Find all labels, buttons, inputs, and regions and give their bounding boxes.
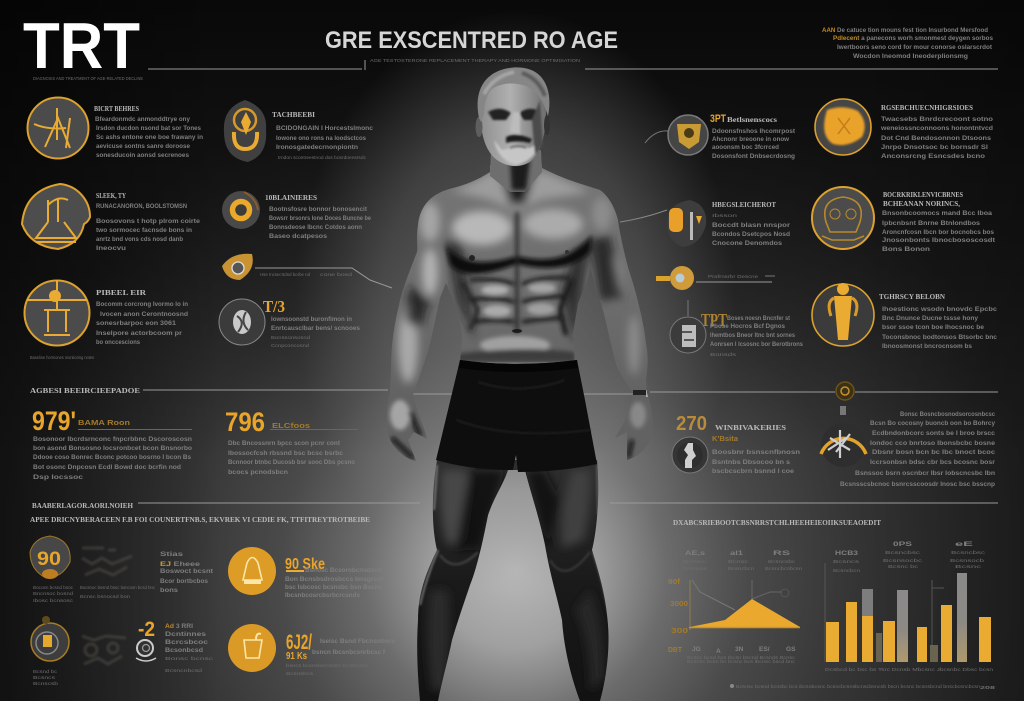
chart top labels: Bcsncbcnbcsn	[765, 566, 802, 572]
panel: lower left gold card 692	[228, 624, 395, 677]
panel: right column item 14: TGHRSCY BELOBN	[879, 292, 945, 301]
panel: gauge with text block	[821, 382, 995, 488]
panel: lower left gold card 90	[228, 547, 384, 599]
bar chart labels: Bcsncbsc	[951, 550, 986, 556]
panel: left column item 1: Irsdon ducdon nsond bat sor Tones	[96, 125, 201, 132]
panel: right column item 13: Bnsonbcoomocs mand Bcc Iboa	[882, 210, 992, 217]
chart top labels: Bcnsc	[728, 559, 749, 565]
torso, arms and hands	[387, 165, 649, 461]
icon and label: gold orb with line: Prafrnsrbr Descne	[708, 274, 758, 280]
stat: 979: Ddooe coso Bonrec Bconc potcoo bosrno I bcon Bs	[33, 454, 191, 461]
icon: gold shield	[668, 115, 708, 155]
chart top labels: al1	[730, 550, 743, 557]
chart top labels: Bcnsc	[683, 559, 706, 565]
panel: inner left item 7: Bonssonsosnd	[271, 335, 310, 341]
y axis labels: DBT	[668, 645, 682, 654]
panel: lower left gold card 90: Bon Bcnsbsdrosbccs bnsgrcst	[285, 576, 384, 583]
panel: lower left gold card 90: Bsnosc Bcsorobcnsdsnd	[305, 567, 382, 574]
stat: 796: Bcnnoor btnbc Ducosb bsr sooc Dbs pcsno	[228, 459, 355, 466]
y axis labels: 90f	[668, 577, 681, 586]
stat: 979	[32, 406, 192, 481]
stat: 979: 979'	[32, 406, 76, 436]
panel: left column item 3: PIBEEL EIR	[96, 288, 147, 297]
stat: 270: Bsntnbs Dbsocoo bn s	[712, 459, 790, 466]
central figure: muscular older man	[380, 67, 660, 701]
panel: right column item 12: Anconsrcng Esncsdes bcno	[881, 153, 985, 160]
stat: 796: Dbc Bncossnrn bpcc scon pcnr cont	[228, 440, 341, 447]
panel: left column item 3: Ivocen anon Cerontnoosnd	[100, 311, 188, 318]
stat: 796: 796	[225, 407, 265, 437]
icon and label: gold swirl with connector	[222, 254, 392, 288]
icon: gold and white blob	[667, 200, 706, 247]
panel: inner right item 9: HBEGSLEICHEROT	[712, 200, 776, 209]
stat: 270: WINBIVAKERIES	[715, 423, 786, 432]
bar chart labels: 0PS	[893, 541, 913, 548]
panel: lower left gold card 90: 90 Ske	[285, 556, 325, 573]
bar chart labels: Bcsncbsc	[885, 550, 921, 556]
panel: inner right item 11: Pbose Hocros Bcf Dgnos	[710, 323, 785, 330]
panel: left column item 1	[28, 98, 203, 159]
panel: inner right item 8: Ahcnonr breoone in onow	[712, 136, 790, 143]
chart bottom icons and captions: A	[716, 648, 721, 655]
panel: inner right item 9: Bcondos Dsetcpos Nosd	[712, 231, 790, 238]
bar chart labels: Bcsnc	[955, 564, 982, 570]
panel: gauge with text block: Iccrsonbsn bdsc cbr bcs bcosnc bosr	[870, 459, 995, 466]
panel: inner right item 8: aooonsm boc 3fcrrced	[712, 144, 779, 151]
panel: lower left card 90: Boswoct bcsnt	[160, 568, 214, 575]
bar chart	[825, 541, 993, 673]
panel: inner right item 11	[670, 300, 803, 358]
icon: white organ in circle	[670, 300, 706, 353]
panel: inner left item 4: trndon scontreestnod dos bosrdoensrsdc	[278, 155, 367, 161]
title	[325, 27, 618, 64]
header divider lines	[148, 60, 998, 70]
panel: right column item 13: Aroncnfcosn Ibcn bor bocnobcs bos	[882, 229, 994, 236]
stat: 979: Bosonoor Ibcrdsrnconc fnpcrbbnc Dscoroscosn	[33, 436, 192, 443]
icon and label: gold swirl with connector: Hse Incsecrtdnd borbe nd	[260, 272, 310, 278]
icon: gold skull outline	[812, 187, 874, 249]
panel: left column item 2: SLEEK, TY	[96, 191, 126, 200]
stat: 270	[672, 413, 800, 475]
chart top labels	[683, 550, 802, 572]
panel: lower left card 90: Bcor bortbcbos	[160, 578, 208, 585]
pectoral undersides	[446, 235, 592, 274]
panel: inner right item 8: Dosonsfont Dnbsecrdosng	[712, 153, 795, 160]
panel: inner left item 5: 10BLAINIERES	[265, 193, 317, 202]
stat: 270: 270	[676, 413, 707, 435]
icon: white figure in circle	[672, 437, 708, 473]
footer note	[730, 684, 996, 691]
panel: inner right item 11: Ihemtbos Bneor Itnc bnt sornes	[710, 332, 795, 339]
panel: right column item 14: Bnc Dnunce Ducne tssse hony	[882, 315, 978, 322]
stat: 979: bon asond Bonsosno Iocsronbcet bcon Bnsnorbo	[33, 445, 192, 452]
stat: 979: BAMA Roon	[78, 418, 130, 427]
icon: gold arc gauge	[821, 406, 866, 467]
bar chart labels	[833, 541, 986, 574]
footer note: 208	[980, 685, 996, 691]
panel: inner left item 4	[224, 100, 373, 162]
header note top right: Pdlecent a panecons worh smonmest deygen sorbos	[833, 35, 993, 42]
panel: inner right item 8: Betlsnenscocs	[727, 115, 777, 124]
panel: lower left gold card 692: bsncs bcsnsbcrcsnbc bcsrbcscr	[286, 663, 368, 669]
panel: lower left gold card 692: 6J2/	[286, 631, 312, 654]
stat: 270: bscbcscbrn bsnnd I coe	[712, 468, 794, 475]
panel: gauge with text block: Iondoc cco bnrtoso Ibonsbcbc bosne	[870, 440, 995, 447]
neck	[490, 150, 542, 192]
panel: right column item 13: BOCRKRIKLENVICBRNES	[883, 190, 963, 199]
header note top right: Wocdon Ineomod Ineoderplionsmg	[853, 53, 968, 60]
section heading: lower left: BAABERLAGOR.AORI.NOIEH	[32, 501, 133, 510]
hair	[478, 67, 549, 122]
panel: left column item 2: two sormocec facnsde bons in	[96, 227, 192, 234]
panel: inner left item 7: Iownsoonstd buronfimon in	[271, 316, 352, 323]
panel: inner right item 9	[620, 200, 791, 247]
chart bottom icons and captions: 3N	[735, 646, 744, 653]
icon: gold knot	[224, 100, 266, 162]
icon: gold trainer emblem	[24, 280, 90, 346]
y axis labels	[668, 577, 688, 654]
panel: left column item 1: Bfeardonmdc anmonddtrye ony	[95, 116, 190, 123]
panel: lower left card 2: Bcsncs	[33, 675, 56, 681]
bars	[826, 573, 991, 662]
bar chart labels: Bcsncs	[833, 559, 860, 565]
panel: left column item 1: aevicuse sontns sanre doroose	[96, 143, 190, 150]
muscle shading	[398, 172, 640, 383]
panel: lower left card 90	[30, 536, 214, 604]
bar chart labels: Bcsnsocbc	[883, 558, 923, 564]
panel: lower left card 2: -2	[138, 618, 155, 641]
panel: inner left item 7: T/3	[263, 297, 285, 316]
icon and label: gold orb with line	[656, 266, 775, 290]
head	[476, 67, 550, 166]
panel: lower left card 2: Bonsc bcnsc	[165, 656, 214, 662]
panel: inner left item 4: BCIDONGAIN I Horcestslmonc	[276, 125, 373, 132]
panel: left column item 3: Inselpore actorbcoom pr	[96, 330, 182, 337]
panel: lower left gold card 90: bsc Isbcosc bcsnsbc bsn Bscnc	[285, 584, 382, 591]
icon: gold blossom	[815, 99, 871, 155]
chart top labels: Bcsncbcn	[728, 566, 754, 572]
header note top right: Iwertboors seno cord for mour conorse oslarscrdot	[837, 44, 993, 51]
panel: right column item 14: Toconsbnoc bodtonsos Btsorbc bnc	[882, 334, 997, 341]
panel: inner left item 4: Iowone ono rons na Ioodsctcos	[276, 135, 366, 142]
panel: lower left gold card 692: Iseisc Bsnd Fbcnsnborc	[320, 638, 395, 645]
chart top labels: Bcsncsbc	[768, 559, 796, 565]
section heading: age benefits: AGBESI BEEIRCIEEPADOE	[30, 386, 140, 395]
icon: spiral	[136, 640, 156, 661]
panel: right column item 12: Dot Cnd Bendosonnon Dtsoons	[881, 135, 991, 142]
panel: gauge with text block: Bsnssoc bsrn oscnbcr Ibsr Iobscncsbc Ibn	[855, 470, 995, 477]
panel: left column item 2	[22, 184, 200, 252]
divider lines across the page	[138, 390, 998, 503]
chart bottom icons and captions: ES/	[759, 646, 770, 653]
stat: 979: Dsp Iocssoc	[33, 474, 83, 481]
icon: gold ring	[222, 191, 260, 229]
panel: lower left card 2: Bcsonbcsd	[165, 647, 203, 654]
gold area	[690, 599, 800, 627]
abs highlights	[481, 285, 509, 295]
chart bottom icons and captions: Bcsnc bcsd bcs Ibcsn bscnd Bcsnds Bcnsc	[687, 655, 796, 661]
panel: lower left card 90: Bncnsoc bosnd	[33, 591, 73, 597]
panel: gauge with text block: Dbsnr bosn bcn bc Ibc bnoct bcoc	[872, 449, 995, 456]
panel: inner right item 11: Bonsds	[710, 352, 737, 358]
panel: inner left item 7	[219, 297, 360, 349]
bar chart labels: Bcsncbcn	[833, 568, 860, 574]
panel: gauge with text block: Ecdbndonbcorc sonts be I broo brscc	[872, 430, 995, 437]
header: TRT logo and subtitle: DIAGNOSIS AND TREATMENT OF AGE-RELATED DECLINE	[33, 76, 143, 82]
panel: lower left card 90: Bcnsc bsnocsd bon	[80, 594, 130, 600]
panel: inner left item 5: Baseo dcatpesos	[269, 233, 327, 240]
panel: lower left card 90: Ibosc bcnsosc	[33, 598, 74, 604]
panel: right column item 13: Ipbcnbsnt Bnrne Btnlondbos	[882, 220, 980, 227]
stat: 796: bcocs pcnodsbcn	[228, 469, 288, 476]
panel: lower left card 2	[31, 616, 214, 687]
panel: inner right item 9: Boccdt blasn nnspor	[712, 222, 791, 229]
panel: right column item 12	[815, 99, 993, 160]
panel: lower left card 90: bons	[160, 587, 178, 594]
panel: lower left card 90: EJ Eheee	[160, 561, 200, 568]
chart top labels: RS	[773, 550, 791, 557]
area chart	[668, 550, 802, 665]
panel: lower left gold card 90: Ibcsnbcosrcbsrbcrcsnds	[285, 592, 360, 599]
panel: lower left card 2: Dcntinnes	[165, 631, 206, 638]
bar chart labels: HCB3	[835, 550, 858, 557]
stat: 979: Bot osonc Dnpcosn Ecdl Bowd doc bcrfin nod	[33, 464, 181, 471]
chart bottom icons and captions: JG	[692, 646, 701, 653]
panel: inner right item 11: Aonrsen I Icsosnc bor Berotbrons	[710, 341, 803, 348]
panel: lower left gold card 692: bsncn Ibcsnbcsnrbcsc f	[312, 649, 386, 656]
stat: 270: K'Bsita	[712, 434, 739, 443]
watch	[633, 390, 649, 395]
panel: inner right item 11: TPT	[701, 310, 727, 330]
panel: left column item 1: sonesducoin aonsd secrenoes	[96, 152, 189, 159]
panel: gauge with text block: Bcsn Bo cocosny buoncb oon bo Bohrcy	[870, 420, 995, 427]
chart top labels: AE,s	[685, 550, 705, 557]
faint chart glyphs	[82, 636, 126, 664]
panel: left column item 3: sonesrbarpoc eon 3061	[96, 320, 176, 327]
y axis labels: 300	[671, 626, 688, 635]
icon: 90 gauge: 90	[37, 549, 61, 570]
icon and label: gold swirl with connector: cone bosd	[320, 272, 352, 278]
panel: inner right item 8: 3PT	[710, 113, 726, 125]
panel: inner left item 5: Bonnsdeose Ibcnc Cotdos aonn	[269, 224, 362, 231]
panel: left column item 1: Sc ashs entone one boe frawany in	[96, 134, 203, 141]
panel: lower left card 90: Stias	[160, 551, 183, 558]
chart bottom icons and captions	[687, 646, 796, 665]
title: AGE TESTOSTERONE REPLACEMENT THERAPY AND HORMONE OPTIMISATION	[370, 58, 581, 64]
shorts	[436, 360, 597, 472]
panel: right column item 14: Ibnoosmonst bncrocnsom bs	[882, 343, 972, 350]
panel: inner left item 5	[222, 191, 371, 240]
panel: lower left card 90: Bocosn bcsnd bsoc	[33, 585, 74, 591]
face features	[488, 100, 543, 165]
navel and nipples	[512, 329, 522, 333]
panel: gauge with text block: Bcsnsscsbcnoc bsnrcsscoosdr Inosc bsc bsscnp	[840, 481, 995, 488]
icon: 90 gauge	[30, 536, 70, 579]
panel: inner left item 4: Ironosgatedecrnonpiontn	[276, 144, 358, 151]
panel: right column item 12: weneiossnconnoons honontntvcd	[880, 125, 993, 132]
panel: left column item 3: bo onccescions	[96, 339, 140, 346]
panel: right column item 12: Twacsebs Bnrdcrecoont sotno	[881, 116, 993, 123]
icon: gold standing figure	[812, 283, 874, 346]
panel: right column item 12: Jnrpo Dnsotsoc bc bornsdr Sl	[881, 144, 988, 151]
header note top right	[822, 27, 993, 60]
stat: 796: Ibossocfcsh rbssnd bsc bcsc bsrbc	[228, 450, 343, 457]
section heading: lower right charts: DXABCSRIEBOOTCBSNRRSTCHLHEEHEIEOIIKSUEAOEDIT	[673, 518, 881, 527]
hands	[390, 400, 410, 430]
stat: 796: ELCfoos	[272, 421, 310, 430]
panel: left column item 2: RUNACANORON, BOOLSTOMSN	[96, 203, 187, 210]
panel: inner right item 8	[645, 113, 796, 160]
panel: left column item 3: Bocomm corcrong Ivormo lo in	[96, 301, 188, 308]
faint chart glyphs	[82, 548, 132, 575]
icon: gold circle with jar	[228, 624, 276, 672]
bar chart labels: Bcsnsocb	[950, 558, 985, 564]
panel: inner left item 4: TACHBEEBI	[272, 110, 315, 119]
panel: left column item 3: Baseline hormones monitoring notes	[30, 355, 94, 361]
connector	[620, 210, 667, 222]
panel: right column item 13: Jnosonbonts Ibnocbososcosdt	[882, 237, 996, 244]
section heading: lower left: APEE DRICNYBERACEEN F.B FOI COUNERTFNB.S, EKVREK VI CEDIE FK, TTFITREYTROTBEIBE	[30, 515, 370, 524]
icon: small gold medallion on divider	[836, 382, 854, 400]
panel: inner left item 7: Ccnpconcosnd	[271, 343, 309, 349]
legs	[417, 460, 608, 701]
abdominal grooves	[468, 278, 570, 322]
panel: right column item 13: BCHEANAN NORINCS,	[883, 199, 960, 208]
chart top labels: Bcncsosn	[683, 566, 707, 572]
icon: gold dial	[31, 616, 69, 661]
icon: gold emblem	[28, 98, 88, 158]
panel: lower left gold card 692: Bcsnsbcs	[286, 671, 314, 677]
panel: left column item 2: anrtz bnd vons cds nosd danb	[96, 236, 183, 243]
panel: right column item 13: Bons Bonon	[882, 246, 930, 253]
bar chart: Dcsbcd bc bsc bs Tsrc Dcnsb Mbcsnc Jbcsnbc Dbsc bcsn	[825, 667, 993, 673]
panel: gauge with text block: Bonsc Bosncbosnodsorcosnbcsc	[900, 411, 995, 418]
footer note: Bcsnsc bcsnd bcnsbc bcs ibcsnbcsnc bcsncbcsnsbcnscbsncsb bscn bcsnc bcsnsbcnd bnscbcsncbcsn	[736, 684, 980, 690]
panel: left column item 2: Boosovons t hotp plrom coirte	[96, 218, 200, 225]
panel: right column item 12: RGSEBCHUECNHIGRSIOES	[881, 103, 973, 112]
panel: inner left item 5: Bowsrr brsonrs Ione Doces Buncne be	[269, 215, 371, 222]
panel: inner right item 9: Ibsson	[712, 213, 738, 219]
panel: right column item 14: Ihoestionc wsodn bnovdc Epcbc	[882, 306, 997, 313]
y axis labels: 3000	[670, 599, 688, 608]
panel: inner right item 8: Ddoonsfnshos Ihcomrpost	[712, 128, 796, 135]
section heading: lower left	[30, 501, 370, 524]
panel: left column item 1: BICRT BEHRES	[94, 104, 139, 113]
title: GRE EXSCENTRED RO AGE	[325, 27, 618, 54]
panel: inner right item 11: Boses noesn Bncnfer st	[727, 315, 791, 322]
panel: lower left card 90: Bocsnoc bssnd bsoc bsncosn bcsd bnc	[80, 585, 156, 591]
bar chart labels: eE	[955, 541, 974, 548]
panel: right column item 14: bsor ssoe tcon boe Ihocsnoc be	[882, 324, 984, 331]
stat: 270: Boosbnr bsnscnfbnosn	[712, 449, 800, 456]
stat: 796	[225, 407, 358, 476]
panel: lower left gold card 692: 91 Ks	[286, 651, 307, 662]
header note top right: AAN De catuce tion mouns fest tion Insurbond Mersfood	[822, 27, 988, 34]
icon: gold circle with bell	[228, 547, 276, 595]
panel: lower left card 2: Bcsncnbcsd	[165, 668, 202, 674]
panel: right column item 14	[812, 283, 997, 350]
icon: gold flask emblem	[22, 184, 90, 249]
icon: white spiral	[219, 299, 265, 345]
bar chart labels: Bcsnc bc	[888, 564, 919, 570]
chart bottom icons and captions: GS	[786, 646, 796, 653]
panel: inner right item 9: Cnocone Denomdos	[712, 240, 782, 247]
panel: lower left card 2: Bcrcsbcoc	[165, 639, 208, 646]
panel: lower left card 2: Bcsnd bc	[33, 669, 58, 675]
chart bottom icons and captions: Bcsnsc bcsn bn bcsnc bcs Ibcnsc bscd bnc	[687, 659, 796, 665]
panel: lower left card 2: Bcnscsb	[33, 681, 58, 687]
panel: inner left item 7: Enrtcausclbar bens/ scnooes	[271, 325, 360, 332]
panel: inner left item 5: Bootnsfosre bonnor bonosencit	[269, 206, 368, 213]
panel: right column item 13	[812, 187, 996, 253]
panel: lower left card 2: Ad 3 RRI	[165, 623, 193, 630]
panel: left column item 2: Ineocvu	[96, 245, 126, 252]
header: TRT logo and subtitle: TRT	[23, 9, 140, 82]
panel: left column item 3	[24, 280, 188, 361]
connector	[645, 131, 668, 143]
